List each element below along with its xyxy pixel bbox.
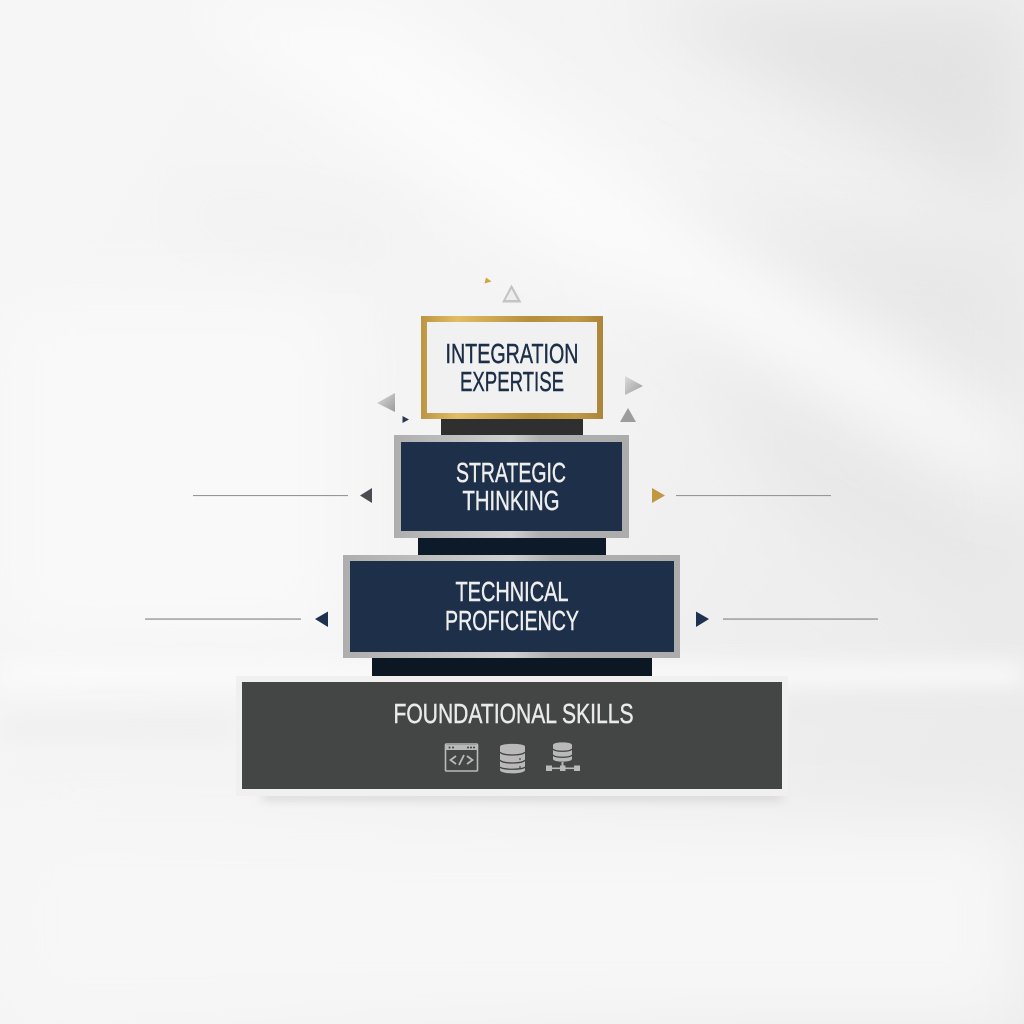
icon: silver triangle left	[377, 393, 395, 412]
side marker: upper right arrow	[652, 488, 665, 503]
connector: top	[441, 419, 583, 436]
connector: upper middle	[418, 538, 606, 555]
tier: integration expertise	[421, 316, 603, 419]
tier: foundational skills	[236, 676, 788, 796]
side marker: lower left line	[145, 618, 301, 620]
tier: technical proficiency	[343, 555, 680, 658]
icon: database	[500, 744, 525, 773]
base shadow	[262, 794, 782, 799]
icon: code window	[446, 744, 478, 771]
tier label: strategic thinking: STRATEGIC	[456, 457, 566, 488]
tier label: foundational skills: FOUNDATIONAL SKILLS	[394, 698, 634, 729]
side marker: lower left arrow	[315, 612, 328, 627]
tier label: integration expertise: EXPERTISE	[460, 366, 564, 397]
icon: small gold triangle	[484, 278, 492, 284]
icon: networked database	[546, 742, 580, 771]
connector: lower middle	[372, 658, 652, 676]
tier label: strategic thinking: THINKING	[462, 485, 560, 516]
decorative floating triangles	[377, 278, 643, 423]
tier label: technical proficiency	[445, 576, 579, 636]
tier label: technical proficiency: PROFICIENCY	[445, 605, 579, 636]
tier label: integration expertise: INTEGRATION	[446, 338, 578, 369]
tier label: integration expertise	[446, 338, 578, 397]
side marker: lower right arrow	[696, 612, 709, 627]
side marker: lower right line	[723, 618, 878, 620]
tier: strategic thinking	[394, 435, 629, 538]
icon: small navy triangle	[402, 416, 409, 423]
side marker: upper right line	[676, 495, 831, 496]
tier label: technical proficiency: TECHNICAL	[456, 576, 568, 607]
side marker: upper left line	[193, 495, 348, 496]
side marker: upper left arrow	[360, 488, 372, 503]
icon: gray triangle lower right	[620, 408, 636, 422]
icon: silver triangle right	[625, 376, 643, 395]
icon: outlined silver triangle top	[502, 284, 522, 302]
tier label: strategic thinking	[456, 457, 566, 516]
